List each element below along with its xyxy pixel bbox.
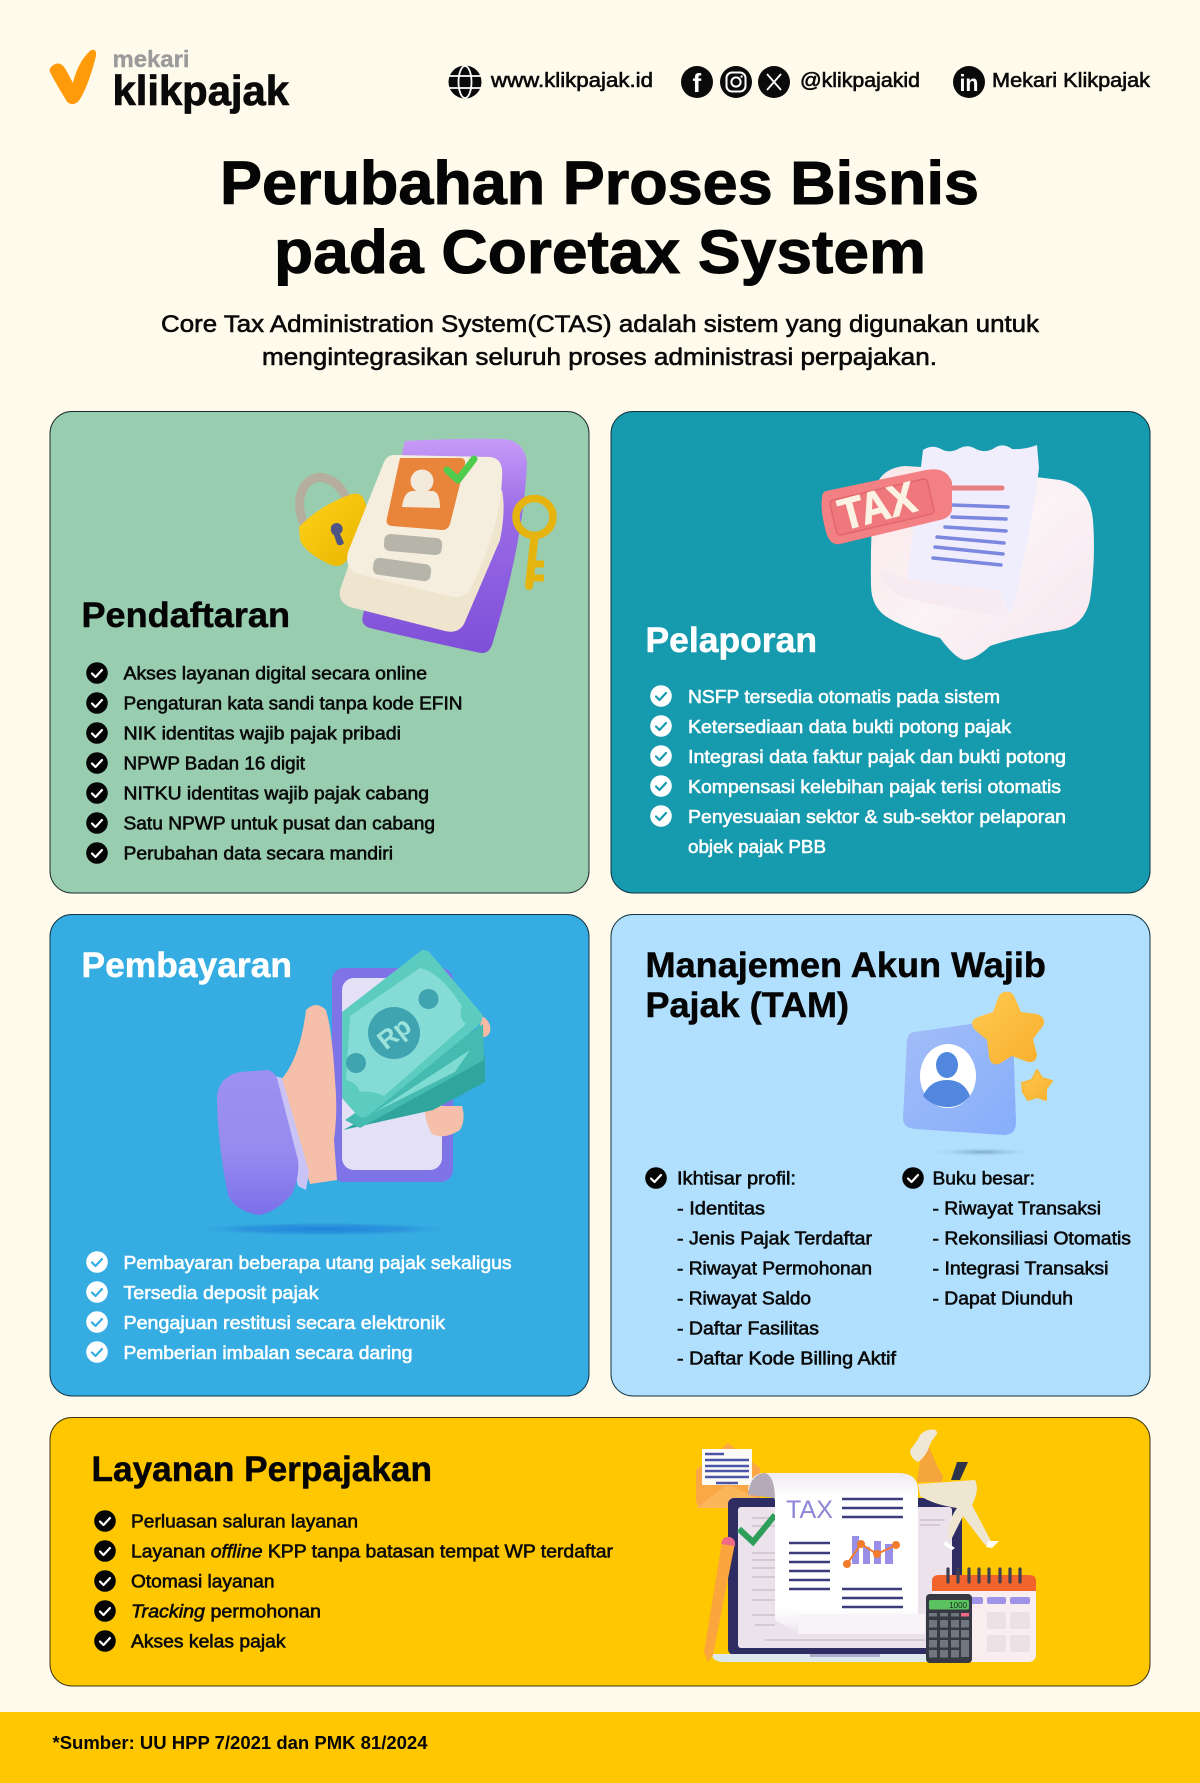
logo text: mekari: mekari [112,46,190,72]
check mark [739,1515,775,1542]
sub-items: - Dapat Diunduh [932,1288,1073,1308]
sub-items: - Daftar Fasilitas [677,1318,819,1338]
sub-items [932,1198,1131,1308]
icon: orange check mark [50,50,96,104]
item heading: Buku besar: [932,1168,1035,1188]
calendar [932,1569,1036,1662]
subtitle: mengintegrasikan seluruh proses administrasi perpajakan. [262,344,937,371]
item: NPWP Badan 16 digit [124,752,305,774]
title: pada Coretax System [274,218,926,286]
contact row [448,66,1151,98]
list: Buku besar [902,1167,1131,1308]
panel: Manajemen Akun Wajib Pajak (TAM) [611,914,1150,1396]
heading: Layanan Perpajakan: Layanan Perpajakan [92,1450,432,1489]
item: Akses layanan digital secara online [124,662,427,684]
text: Rp on banknote: Rp [371,1011,417,1055]
icon: linkedin [953,66,985,98]
illustration: hand holding phone and money [188,950,490,1236]
item: Satu NPWP untuk pusat dan cabang [124,812,435,834]
receipt [748,1473,925,1634]
illustration: padlock, profile document and key [299,439,553,653]
item heading: Ikhtisar profil: [677,1168,796,1188]
icon: globe [448,66,482,98]
title [220,149,979,286]
calculator [926,1594,972,1663]
item: Pemberian imbalan secara daring [124,1342,412,1363]
list: Pembayaran items [86,1251,511,1363]
item: Pengaturan kata sandi tanpa kode EFIN [124,692,462,714]
heading: Manajemen Akun Wajib Pajak (TAM): Manajemen Akun Wajib [646,946,1046,985]
sub-items: - Rekonsiliasi Otomatis [932,1228,1131,1248]
item: Ketersediaan data bukti potong pajak [688,716,1012,737]
list: Layanan items [94,1510,613,1652]
sub-items: - Riwayat Saldo [677,1288,811,1308]
heading: Pelaporan: Pelaporan [646,621,817,660]
source note: *Sumber: UU HPP 7/2021 dan PMK 81/2024 [52,1733,428,1753]
item: objek pajak PBB [688,836,826,857]
item: Kompensasi kelebihan pajak terisi otomatis [688,776,1061,797]
item: Layanan offline KPP tanpa batasan tempat WP terdaftar [131,1540,613,1562]
icon: linkedin: in [960,70,978,96]
sub-items [677,1198,897,1368]
footer band [0,1712,1200,1783]
illustration: laptop, tax receipt, calendar, calculator and woman [696,1430,1036,1663]
text: TAX tag: TAX [833,473,921,540]
sub-items: - Riwayat Transaksi [932,1198,1101,1218]
heading: Pendaftaran: Pendaftaran [82,596,290,635]
sub-items: - Integrasi Transaksi [932,1258,1108,1278]
laptop [712,1498,962,1662]
subtitle: Core Tax Administration System(CTAS) adalah sistem yang digunakan untuk [161,311,1040,338]
envelope [696,1443,760,1508]
item: Tracking permohonan [131,1600,321,1622]
item: NITKU identitas wajib pajak cabang [124,782,429,804]
illustration: profile card with stars [903,992,1052,1157]
item: Pengajuan restitusi secara elektronik [124,1312,446,1333]
item: Tersedia deposit pajak [124,1282,319,1303]
icon: facebook: f [692,68,702,98]
list: Ikhtisar profil [645,1167,897,1368]
item: Otomasi layanan [131,1570,274,1592]
icon: facebook [681,66,713,98]
icon: instagram [720,66,752,98]
heading: Manajemen Akun Wajib Pajak (TAM): Pajak (TAM) [646,986,849,1025]
panel: Pendaftaran [50,412,589,893]
item: Perluasan saluran layanan [131,1510,358,1532]
illustration: speech bubble with TAX receipt [822,445,1094,660]
item: Pembayaran beberapa utang pajak sekaligus [124,1252,512,1273]
item: Akses kelas pajak [131,1630,286,1652]
subtitle [161,311,1040,371]
text: TAX on receipt: TAX [786,1496,833,1524]
item: Integrasi data faktur pajak dan bukti potong [688,746,1066,767]
item: Penyesuaian sektor & sub-sektor pelaporan [688,806,1066,827]
sub-items: - Daftar Kode Billing Aktif [677,1348,897,1368]
icon: X [758,66,790,98]
heading: Pembayaran: Pembayaran [82,946,292,985]
panel: Pelaporan [611,412,1150,893]
heading: Manajemen Akun Wajib Pajak (TAM) [646,946,1046,1025]
text: calculator display: 1000 [949,1601,968,1610]
logo text: klikpajak: klikpajak [112,67,290,114]
panel: Pembayaran [50,914,589,1396]
item [650,805,1066,857]
panel: Layanan Perpajakan [50,1418,1150,1686]
item: NIK identitas wajib pajak pribadi [124,722,401,744]
linkedin name text: Mekari Klikpajak [992,70,1151,92]
title: Perubahan Proses Bisnis [220,149,979,217]
woman with laptop [910,1430,999,1550]
list: Pelaporan items [650,685,1066,857]
list: Pendaftaran items [86,662,462,864]
pencil [704,1537,735,1662]
item: NSFP tersedia otomatis pada sistem [688,686,1000,707]
sub-items: - Jenis Pajak Terdaftar [677,1228,872,1248]
item: Perubahan data secara mandiri [124,842,393,864]
logo: mekari klikpajak [50,46,290,114]
sub-items: - Riwayat Permohonan [677,1258,872,1278]
social handle text: @klikpajakid [800,70,920,92]
website text: www.klikpajak.id [490,70,653,92]
sub-items: - Identitas [677,1198,765,1218]
